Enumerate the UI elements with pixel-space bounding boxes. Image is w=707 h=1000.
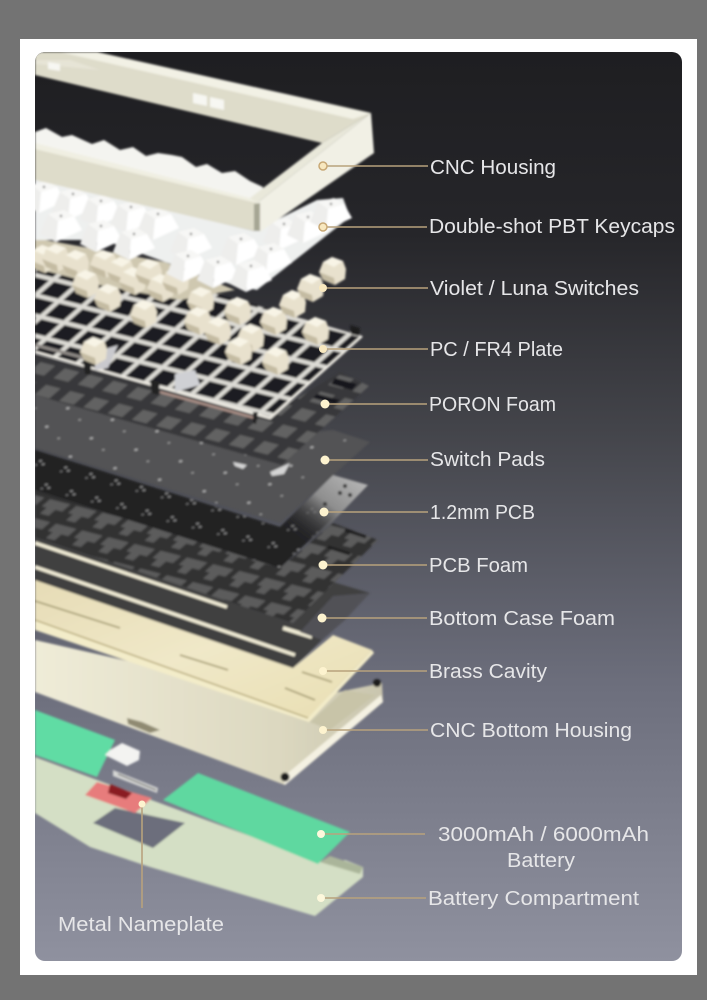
- callout: Switches: [319, 278, 639, 300]
- CNC housing frame: [35, 52, 374, 232]
- callout: Battery: 3000mAh / 6000mAh: [438, 824, 649, 846]
- callout: Battery Compartment: [317, 888, 639, 910]
- callout: CNC Bottom Housing: CNC Bottom Housing: [430, 720, 632, 742]
- PCB foam: [35, 490, 378, 623]
- callout: PORON Foam: PORON Foam: [429, 394, 556, 416]
- white connector: [105, 743, 158, 793]
- callout: PCB: 1.2mm PCB: [430, 502, 535, 524]
- switch pads: [35, 393, 370, 523]
- callout: Battery Compartment: Battery Compartment: [428, 888, 639, 910]
- PC / FR4 plate: [35, 260, 362, 424]
- callout: Switch Pads: Switch Pads: [430, 449, 545, 471]
- callout: Switches: Violet / Luna Switches: [430, 278, 639, 300]
- brass cavity: [35, 580, 374, 722]
- callout: PCB Foam: PCB Foam: [429, 555, 528, 577]
- callout: Keycaps: [319, 216, 675, 238]
- callout: Brass Cavity: [319, 661, 547, 683]
- callout: Brass Cavity: Brass Cavity: [429, 661, 547, 683]
- callout: PCB: [320, 502, 535, 524]
- battery compartment: [35, 757, 363, 916]
- callout: Bottom Case Foam: [318, 608, 615, 630]
- PCB: [35, 450, 368, 568]
- callout: Plate: [319, 339, 563, 361]
- green battery, left: [35, 710, 115, 777]
- bottom case foam: [35, 537, 370, 668]
- callout: Bottom Case Foam: Bottom Case Foam: [429, 608, 615, 630]
- callout: Plate: PC / FR4 Plate: [430, 339, 563, 361]
- callout: Keycaps: Double-shot PBT Keycaps: [429, 216, 675, 238]
- callout: CNC Bottom Housing: [319, 720, 632, 742]
- green battery, right: [163, 773, 350, 864]
- callout: CNC Housing: [319, 157, 556, 179]
- switches: [29, 238, 346, 375]
- callout: PCB Foam: [318, 555, 528, 577]
- callout: PORON Foam: [320, 394, 556, 416]
- callout: Battery: [317, 824, 649, 872]
- exploded keyboard illustration: [23, 52, 383, 916]
- callout: Battery: Battery: [507, 850, 575, 872]
- callout: Metal Nameplate: Metal Nameplate: [58, 914, 224, 936]
- PORON foam: [35, 355, 369, 465]
- CNC bottom housing: [35, 640, 383, 785]
- keycaps: [23, 178, 352, 292]
- metal nameplate part: [85, 782, 152, 813]
- callout: CNC Housing: CNC Housing: [430, 157, 556, 179]
- callout: Switch Pads: [320, 449, 545, 471]
- callout: Metal Nameplate: [58, 800, 224, 936]
